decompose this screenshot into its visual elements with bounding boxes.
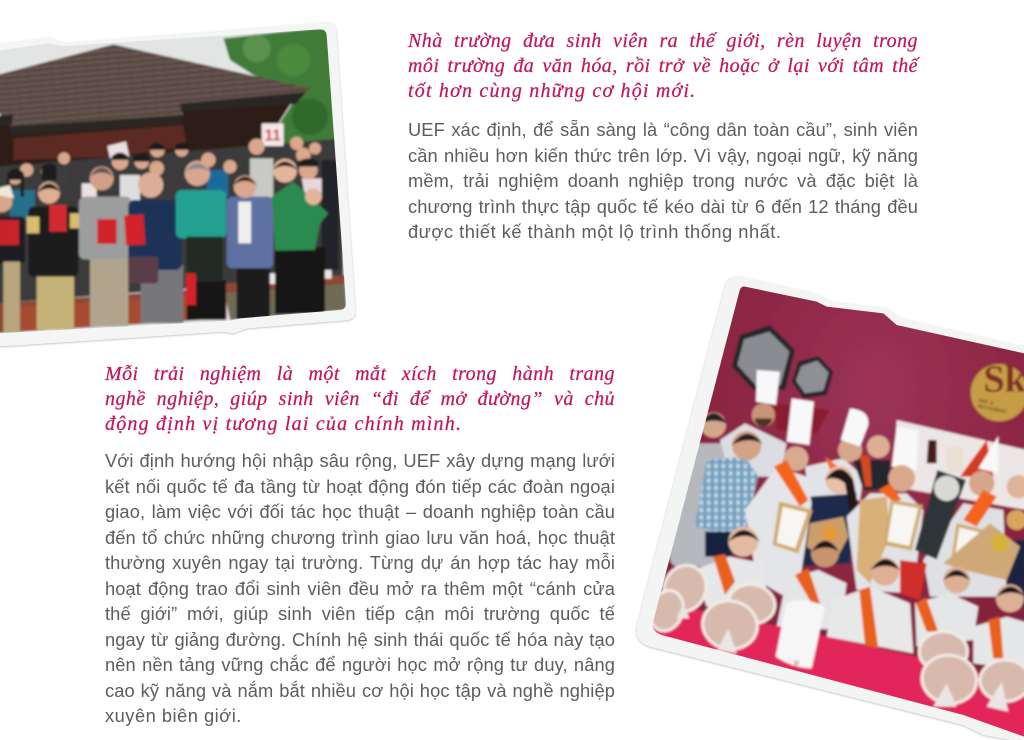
text block: global citizen programme: được thiết kế thành một lộ trình thống nhất.: [408, 221, 781, 242]
hexagon pictures: [732, 325, 833, 398]
number sign 11: 11: [265, 128, 281, 145]
gold restaurant logo: [971, 359, 1024, 421]
front row chefs: [693, 527, 1024, 670]
photo content: [630, 270, 1024, 740]
text block: international ecosystem: giao, làm việc với đối tác học thuật – doanh nghiệp toàn cầu: [105, 501, 615, 522]
photo: chefs award ceremony: [630, 270, 1024, 740]
text block: international ecosystem: [105, 450, 615, 726]
people front row: [0, 159, 328, 333]
heading: bottom left quote: nghề nghiệp, giúp sinh viên “đi để mở đường” và chủ: [105, 388, 615, 410]
text block: international ecosystem: thế giới” mới, giúp sinh viên tiếp cận môi trường quốc tế: [105, 603, 615, 624]
text block: global citizen programme: chương trình thực tập quốc tế kéo dài từ 6 đến 12 tháng đều: [408, 196, 918, 216]
certificates: [773, 500, 985, 563]
photo frame: [0, 23, 355, 347]
heading: bottom left quote: [104, 363, 615, 435]
text block: global citizen programme: cần nhiều hơn kiến thức trên lớp. Vì vậy, ngoại ngữ, kỹ năng: [408, 144, 918, 166]
text block: international ecosystem: nên nền tảng vững chắc để người học mở rộng tư duy, nâng: [105, 654, 615, 675]
text block: global citizen programme: mềm, trải nghiệm doanh nghiệp trong nước và đặc biệt là: [408, 170, 918, 191]
text block: international ecosystem: xuyên biên giới.: [105, 705, 242, 726]
heading: top right quote: tốt hơn cùng những cơ hội mới.: [408, 80, 696, 102]
text block: international ecosystem: hoạt động trao đổi sinh viên đều mở ra thêm một “cánh cửa: [105, 578, 615, 598]
photo: group at the pavilion: [0, 23, 357, 347]
photo content: [0, 27, 357, 337]
text block: international ecosystem: đến tổ chức những chương trình giao lưu văn hoá, học thuật: [105, 526, 615, 548]
chef hat box: V: [793, 658, 800, 668]
display board: [915, 470, 966, 559]
text block: global citizen programme: [408, 119, 918, 242]
number sign 11: [262, 123, 284, 146]
text block: international ecosystem: thường xuyên ngay tại trường. Từng dự án hợp tác hay mỗi: [105, 552, 615, 573]
trophies: [645, 559, 1024, 708]
heading: top right quote: môi trường đa văn hóa, rồi trở về hoặc ở lại với tâm thế: [408, 55, 918, 77]
text block: international ecosystem: Với định hướng hội nhập sâu rộng, UEF xây dựng mạng lưới: [105, 450, 615, 471]
text block: international ecosystem: cao kỹ năng và nắm bắt nhiều cơ hội học tập và nghề nghiệp: [105, 680, 615, 700]
heading: top right quote: Nhà trường đưa sinh viên ra thế giới, rèn luyện trong: [408, 30, 918, 52]
chef hat box: [776, 600, 825, 668]
heading: bottom left quote: động định vị tương lai của chính mình.: [105, 413, 462, 435]
chef hats: [756, 370, 998, 473]
text block: global citizen programme: UEF xác định, để sẵn sàng là “công dân toàn cầu”, sinh viên: [408, 119, 918, 140]
gold restaurant logo: BAR &: [978, 398, 994, 407]
photo frame: [636, 276, 1024, 740]
heading: bottom left quote: Mỗi trải nghiệm là một mắt xích trong hành trang: [105, 363, 615, 385]
heading: top right quote: [408, 30, 920, 102]
text block: international ecosystem: kết nối quốc tế đa tầng từ hoạt động đón tiếp các đoàn ngoại: [105, 476, 615, 496]
red table: [650, 608, 1024, 740]
gold restaurant logo: RESTAURANT: [977, 403, 1007, 416]
text block: international ecosystem: ngay từ giảng đường. Chính hệ sinh thái quốc tế hóa này tạo: [105, 628, 615, 650]
